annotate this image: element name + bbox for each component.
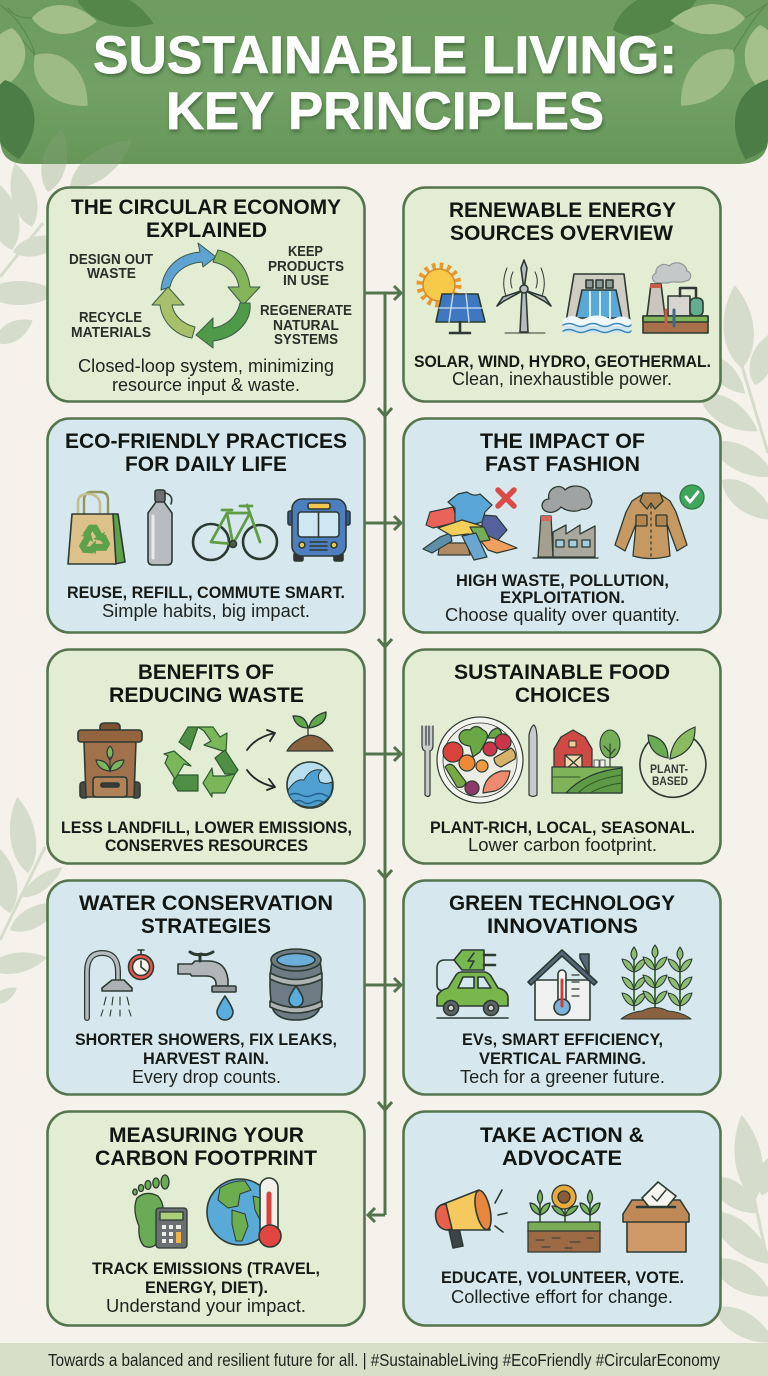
panel: green technology — [404, 880, 720, 1094]
icon: plate of food — [437, 717, 523, 803]
panel: fast fashion — [404, 418, 720, 632]
text block: Choose quality over quantity. — [445, 605, 680, 625]
icon: community planter — [528, 1185, 600, 1252]
icon: sprout in soil — [287, 712, 333, 751]
icon: jacket — [615, 493, 687, 558]
icon: geothermal plant — [643, 263, 708, 333]
heading — [109, 660, 304, 707]
icon: reusable bag — [68, 492, 125, 564]
text block: VERTICAL FARMING. — [479, 1049, 646, 1068]
heading — [480, 429, 645, 476]
heading: EXPLAINED — [146, 218, 267, 242]
text block: Every drop counts. — [132, 1067, 281, 1087]
header leaves right — [606, 0, 768, 168]
text block: EXPLOITATION. — [500, 588, 625, 607]
icon: sun and solar panel — [420, 266, 485, 333]
icon: globe with thermometer — [207, 1178, 281, 1247]
labels: circular economy stages — [69, 244, 352, 348]
panel: circular economy — [48, 188, 364, 402]
text block: Collective effort for change. — [451, 1287, 673, 1307]
heading — [449, 891, 675, 938]
header leaves left — [0, 0, 159, 163]
heading: MEASURING YOUR — [109, 1123, 304, 1147]
footer bar — [0, 1343, 768, 1376]
icon: knife — [529, 725, 537, 796]
text block — [441, 1268, 684, 1307]
text block: EVs, SMART EFFICIENCY, — [462, 1030, 663, 1049]
heading: ADVOCATE — [502, 1146, 622, 1170]
title — [93, 26, 677, 141]
icon: shower with timer — [87, 950, 154, 1018]
icon: rain barrel — [270, 949, 322, 1020]
text block: SHORTER SHOWERS, FIX LEAKS, — [75, 1030, 337, 1049]
icon: bus — [288, 499, 350, 561]
text block: CONSERVES RESOURCES — [105, 836, 308, 855]
heading — [95, 1123, 317, 1170]
heading: BENEFITS OF — [138, 660, 274, 684]
title: KEY PRINCIPLES — [166, 82, 604, 141]
text block: Tech for a greener future. — [460, 1067, 665, 1087]
icon: plant-based badge: BASED — [652, 774, 688, 788]
panel: water conservation — [48, 880, 364, 1094]
icon: recycling symbol — [164, 727, 238, 797]
icon: clothes pile — [423, 492, 517, 560]
heading: FAST FASHION — [485, 452, 640, 476]
text block: resource input & waste. — [112, 375, 300, 395]
icon: smart home thermometer — [528, 950, 597, 1020]
text block: Lower carbon footprint. — [468, 835, 657, 855]
icon: hydro dam — [563, 274, 631, 333]
labels: circular economy stages: WASTE — [87, 266, 136, 282]
header banner — [0, 0, 768, 198]
labels: circular economy stages: PRODUCTS — [268, 259, 344, 275]
text block — [445, 571, 680, 625]
icon: megaphone — [436, 1189, 507, 1248]
icon: bicycle — [193, 505, 277, 560]
text block: Clean, inexhaustible power. — [452, 369, 672, 389]
text block: SOLAR, WIND, HYDRO, GEOTHERMAL. — [414, 352, 711, 371]
heading: THE IMPACT OF — [480, 429, 645, 453]
text block: HIGH WASTE, POLLUTION, — [456, 571, 669, 590]
heading: STRATEGIES — [141, 914, 271, 938]
labels: circular economy stages: REGENERATE — [260, 303, 352, 319]
text block: Simple habits, big impact. — [102, 601, 310, 621]
heading: SUSTAINABLE FOOD — [454, 660, 670, 684]
labels: circular economy stages: MATERIALS — [71, 325, 151, 341]
panel: carbon footprint — [48, 1112, 364, 1326]
text block — [430, 818, 695, 855]
heading — [449, 198, 676, 245]
icon: green check — [680, 485, 704, 509]
icon: electric car and plug — [437, 950, 508, 1018]
icon: footprint and calculator — [133, 1175, 187, 1248]
icon: circular arrows — [152, 243, 260, 348]
labels: circular economy stages: KEEP — [288, 244, 323, 260]
icon: factory with smoke — [533, 486, 598, 558]
heading — [65, 429, 347, 476]
icon: water bottle — [148, 490, 172, 565]
labels: circular economy stages: IN USE — [283, 273, 329, 289]
heading: TAKE ACTION & — [480, 1123, 644, 1147]
icon: fork — [422, 726, 433, 796]
heading: WATER CONSERVATION — [79, 891, 333, 915]
heading — [79, 891, 333, 938]
text block: HARVEST RAIN. — [143, 1049, 269, 1068]
icon: plant-based badge — [640, 727, 706, 797]
heading: REDUCING WASTE — [109, 683, 304, 707]
heading: INNOVATIONS — [487, 914, 638, 938]
labels: circular economy stages: RECYCLE — [79, 310, 142, 326]
text block: ENERGY, DIET). — [145, 1278, 268, 1297]
icon: plant-based badge: PLANT- — [650, 762, 688, 776]
icon: compost bin — [78, 723, 142, 798]
icon: dripping tap — [178, 952, 236, 1020]
icon: ballot box — [623, 1182, 689, 1252]
text block: REUSE, REFILL, COMMUTE SMART. — [67, 583, 345, 602]
heading — [480, 1123, 644, 1170]
text block — [92, 1259, 320, 1316]
icon: water globe — [287, 762, 333, 808]
text block — [61, 818, 352, 855]
text block — [460, 1030, 665, 1087]
labels: circular economy stages: DESIGN OUT — [69, 252, 153, 268]
text block — [414, 352, 711, 389]
heading: FOR DAILY LIFE — [125, 452, 287, 476]
heading: THE CIRCULAR ECONOMY — [71, 195, 341, 219]
flow connectors — [365, 286, 401, 1222]
text block — [75, 1030, 337, 1087]
text block: PLANT-RICH, LOCAL, SEASONAL. — [430, 818, 695, 837]
heading: CARBON FOOTPRINT — [95, 1146, 317, 1170]
icon: wind turbine — [497, 260, 551, 333]
heading: GREEN TECHNOLOGY — [449, 891, 675, 915]
panel: reducing waste — [48, 650, 364, 864]
panel: eco-friendly practices — [48, 418, 364, 632]
title: SUSTAINABLE LIVING: — [93, 26, 677, 85]
arrows to soil and water — [247, 730, 275, 790]
pale leaves overlapping header edge — [36, 126, 140, 198]
text block — [78, 356, 334, 395]
text block — [67, 583, 345, 621]
labels: circular economy stages: NATURAL — [273, 318, 339, 334]
heading: SOURCES OVERVIEW — [450, 221, 674, 245]
labels: circular economy stages: SYSTEMS — [274, 332, 338, 348]
text block: TRACK EMISSIONS (TRAVEL, — [92, 1259, 320, 1278]
heading: CHOICES — [515, 683, 610, 707]
icon: barn and fields — [552, 730, 622, 793]
text block: LESS LANDFILL, LOWER EMISSIONS, — [61, 818, 352, 837]
heading: ECO-FRIENDLY PRACTICES — [65, 429, 347, 453]
heading — [454, 660, 670, 707]
text block: Closed-loop system, minimizing — [78, 356, 334, 376]
icon: vertical farming plants — [621, 945, 692, 1019]
text block: EDUCATE, VOLUNTEER, VOTE. — [441, 1268, 684, 1287]
panel: sustainable food — [404, 650, 720, 864]
heading — [71, 195, 341, 242]
text block: Understand your impact. — [106, 1296, 306, 1316]
icon: red cross — [498, 490, 514, 506]
panel: renewable energy — [404, 188, 720, 402]
panel: take action — [404, 1112, 720, 1326]
heading: RENEWABLE ENERGY — [449, 198, 676, 222]
